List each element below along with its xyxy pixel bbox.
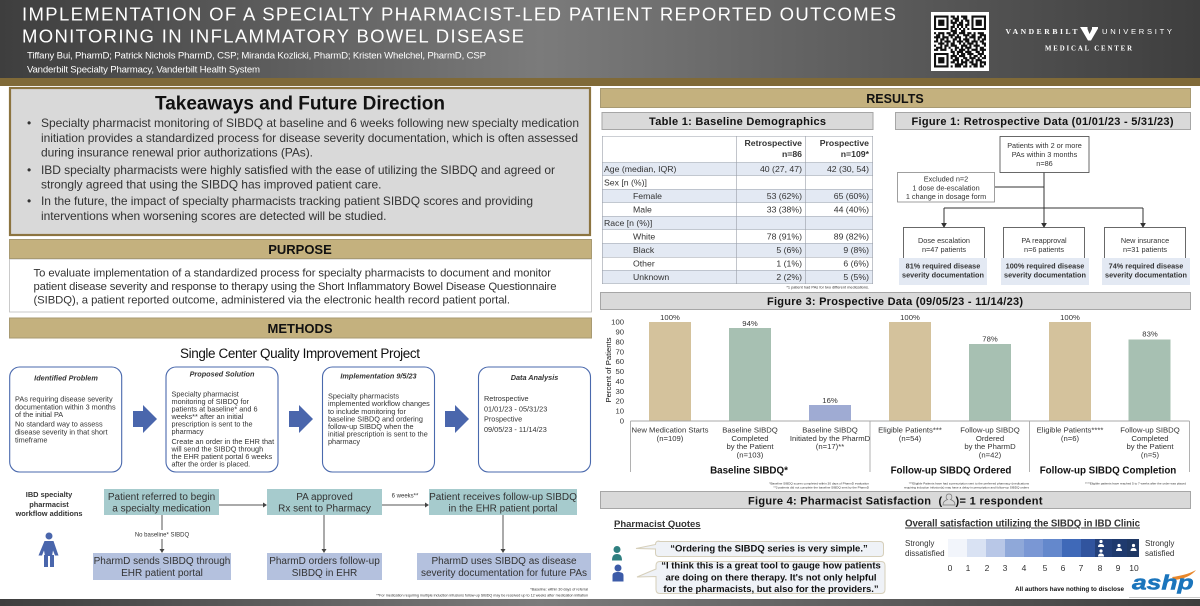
scale numbers: 9 [1116, 563, 1121, 573]
method box: implementation: implemented workflow changes [328, 399, 430, 408]
method box: proposed solution: prescription is sent to the [172, 420, 253, 428]
bullet list: during insurance renewal prior authorizations (PAs). [41, 146, 313, 160]
flow box: patients: PAs within 3 months [1012, 150, 1078, 159]
logo: Vanderbilt University Medical Center: VANDERBILT [1006, 27, 1078, 36]
y axis [604, 318, 624, 426]
method box: proposed solution: after the order is placed. [172, 460, 250, 468]
flow box: excluded: 1 dose de-escalation [912, 184, 980, 192]
demographics table: Unknown [633, 272, 669, 282]
demographics table: Female [633, 191, 662, 201]
scale numbers: 4 [1022, 563, 1027, 573]
data labels [660, 313, 1158, 405]
group titles: Follow-up SIBDQ Ordered [891, 466, 1011, 476]
scale numbers: 5 [1043, 563, 1048, 573]
category labels: Follow-up SIBDQ [960, 426, 1020, 434]
category labels: Completed [731, 434, 769, 443]
heading: figure 1: Figure 1: Retrospective Data (01/01/23 - 5/31/23) [912, 116, 1174, 128]
quote bubble 1: “Ordering the SIBDQ series is very simple.” [670, 544, 868, 554]
heading: takeaways: Takeaways and Future Direction [155, 94, 445, 114]
teal step: receives follow-up: Patient receives follow-up SIBDQ [429, 492, 577, 503]
heading: purpose: PURPOSE [268, 242, 332, 257]
flow box: dose escalation: n=47 patients [922, 245, 966, 254]
panel: figure 1 retrospective data [896, 112, 1190, 285]
y axis: Percent of Patients [604, 337, 613, 402]
connectors [160, 502, 506, 553]
method box: proposed solution: pharmacy [172, 427, 204, 436]
flow box: dose escalation: severity documentation [902, 270, 984, 280]
category labels: Baseline SIBDQ [802, 426, 858, 434]
heading: figure 4: Figure 4: Pharmacist Satisfaction [748, 496, 931, 508]
demographics table: 5 (6%) [776, 245, 802, 255]
category labels: (n=5) [1141, 450, 1160, 460]
category labels [632, 426, 1180, 460]
category labels: by the PharmD [964, 442, 1016, 451]
category labels: (n=6) [1061, 434, 1080, 443]
logo: Vanderbilt University Medical Center: UNIVERSITY [1102, 27, 1172, 36]
demographics table: 5 (5%) [843, 272, 869, 282]
blue step: documentation: severity documentation for future PAs [421, 568, 587, 579]
connector label: no baseline: No baseline* SIBDQ [135, 532, 190, 538]
flow box: new insurance: 74% required disease [1109, 262, 1183, 270]
method box: data analysis: Prospective [484, 414, 522, 424]
demographics table: 6 (6%) [843, 258, 869, 268]
purpose text: (SIBDQ), a patient reported outcome, administered via the electronic health record patient portal. [34, 294, 510, 306]
workflow footnotes [376, 588, 588, 598]
heading: figure 4: )= 1 respondent [956, 496, 1043, 508]
heading: methods: METHODS [268, 321, 333, 336]
icon: teal pharmacist [612, 546, 622, 560]
demographics table: 53 (62%) [767, 191, 802, 201]
chart footnotes: ***Eligible Patients have had a prescription sent to the preferred pharmacy (medications [909, 482, 1029, 486]
bullet list: • [27, 163, 31, 177]
bullet list: • [27, 116, 31, 130]
flow box: patients: n=86 [1036, 159, 1053, 168]
arrow [133, 405, 157, 433]
method box: proposed solution: Proposed Solution [190, 370, 255, 378]
method box: data analysis: Data Analysis [511, 373, 558, 382]
demographics table: Prospective [820, 138, 869, 148]
blue step: documentation [417, 553, 591, 580]
method box: implementation: Implementation 9/5/23 [340, 372, 417, 380]
logo: Vanderbilt University Medical Center [1006, 27, 1172, 52]
teal step: receives follow-up [429, 489, 577, 515]
category labels: Follow-up SIBDQ [1120, 426, 1180, 434]
method box: data analysis [478, 367, 590, 472]
quote bubble 2 [637, 560, 885, 595]
teal step: referred [104, 489, 219, 515]
demographics table: Age (median, IQR) [604, 164, 677, 174]
authors: Tiffany Bui, PharmD; Patrick Nichols PharmD, CSP; Miranda Kozlicki, PharmD; Kristen Whelchel, PharmD, CSP [27, 50, 486, 62]
scale numbers: 0 [948, 563, 953, 573]
panel: methods [10, 318, 592, 472]
heading: results [600, 88, 1190, 108]
flow box: PA reapproval: n=6 patients [1024, 245, 1064, 254]
heading: methods [10, 318, 592, 338]
flow box: excluded [898, 172, 994, 202]
heading: purpose [10, 240, 592, 258]
demographics table: 89 (82%) [834, 232, 869, 242]
demographics table: 65 (60%) [834, 191, 869, 201]
authors [27, 50, 486, 76]
scale numbers: 10 [1129, 563, 1139, 573]
flow box: PA reapproval: PA reapproval [1021, 236, 1067, 245]
data labels: 100% [660, 313, 680, 322]
method box: proposed solution: the EHR patient portal 6 weeks [172, 452, 272, 461]
demographics table: White [633, 232, 655, 242]
panel: figure 4 pharmacist satisfaction [600, 492, 1200, 598]
demographics table: Sex [n (%)] [604, 178, 647, 188]
heading: table 1 [602, 112, 873, 130]
flow box: patients [1000, 136, 1089, 172]
y axis: 40 [615, 377, 624, 386]
demographics table: Male [633, 204, 652, 214]
category labels: Ordered [976, 434, 1004, 443]
y axis: 80 [615, 338, 624, 346]
logo: ashp: ashp [1132, 572, 1194, 594]
method box: implementation [322, 367, 434, 472]
data labels: 16% [822, 396, 838, 405]
demographics table: 78 (91%) [767, 232, 802, 242]
scale numbers: 2 [985, 563, 990, 573]
flow box: PA reapproval: severity documentation [1004, 270, 1086, 280]
scale end labels: Strongly [905, 539, 934, 548]
category labels: Baseline SIBDQ [722, 426, 778, 434]
bullet list: initiation provides a standardized process for disease severity documentation, which is often assessed [41, 131, 578, 145]
method box: proposed solution: monitoring of SIBDQ for [172, 397, 250, 406]
workflow label: IBD specialty [26, 490, 73, 499]
teal step: receives follow-up: in the EHR patient portal [449, 504, 557, 514]
purpose text: To evaluate implementation of a standardized process for specialty pharmacists to document and monitor [34, 268, 551, 280]
method box: proposed solution: Create an order in the EHR that [172, 437, 274, 446]
logo: Vanderbilt University Medical Center: MEDICAL CENTER [1045, 46, 1132, 52]
bullet list: Specialty pharmacist monitoring of SIBDQ at baseline and 6 weeks following new specialty medication [41, 116, 579, 130]
blue step: orders follow-up: SIBDQ in EHR [292, 568, 357, 579]
quotes heading: Pharmacist Quotes [614, 519, 701, 530]
flow box: new insurance: n=31 patients [1123, 245, 1167, 254]
y axis: 50 [615, 367, 624, 376]
flow box: dose escalation: 81% required disease [906, 262, 980, 270]
workflow diagram [15, 489, 591, 598]
purpose text [34, 268, 556, 306]
flow box: new insurance: New insurance [1121, 236, 1169, 245]
demographics table: 42 (30, 54) [827, 164, 869, 174]
bullet list: IBD specialty pharmacists were highly satisfied with the ease of utilizing the SIBDQ and agreed or [41, 163, 555, 177]
heat scale [948, 539, 1139, 557]
arrow [289, 405, 313, 433]
teal step: PA approved: PA approved [296, 492, 353, 503]
footer bar [0, 599, 1200, 606]
authors: Vanderbilt Specialty Pharmacy, Vanderbilt Health System [27, 64, 260, 76]
demographics table: 40 (27, 47) [760, 164, 802, 174]
category labels: by the Patient [1126, 442, 1174, 451]
arrow [445, 405, 469, 433]
method box: identified problem: PAs requiring disease severity [15, 394, 113, 404]
blue step: orders follow-up: PharmD orders follow-up [269, 556, 380, 567]
heading: figure 4: ( [938, 496, 942, 508]
blue step: documentation: PharmD uses SIBDQ as disease [431, 556, 577, 567]
blue step: sends SIBDQ: PharmD sends SIBDQ through [94, 556, 230, 567]
group titles [710, 466, 1176, 476]
demographics table: Retrospective [745, 138, 802, 148]
teal step: PA approved [267, 489, 382, 515]
workflow footnotes: *Baseline: within 30 days of referral [530, 588, 588, 592]
demographics table: 9 (8%) [843, 245, 869, 255]
scale numbers: 6 [1061, 563, 1066, 573]
data labels: 78% [982, 334, 998, 344]
bullet list: In the future, the impact of specialty pharmacists tracking patient SIBDQ scores and providing [41, 194, 533, 208]
scale end labels: dissatisfied [905, 549, 945, 558]
category labels: Eligible Patients*** [878, 426, 942, 434]
method box: identified problem [10, 367, 122, 472]
title [22, 4, 896, 46]
heading: figure 1 [896, 112, 1190, 130]
y axis: 70 [615, 348, 624, 356]
scale numbers: 8 [1098, 563, 1103, 573]
scale end labels: Strongly [1145, 539, 1174, 548]
panel: takeaways and future direction [10, 88, 590, 235]
chart footnotes: ****Eligible patients have reached 5 to 7 weeks after the order was placed [1085, 482, 1186, 486]
method box: identified problem: disease severity in that short [15, 428, 107, 436]
method box: implementation: initial prescription is sent to the [328, 430, 428, 438]
category labels: Eligible Patients**** [1037, 426, 1103, 434]
demographics table: 33 (38%) [767, 204, 802, 214]
method box: identified problem: timeframe [15, 436, 47, 444]
scale numbers: 3 [1003, 563, 1008, 573]
data labels: 100% [1060, 313, 1080, 322]
y axis: 0 [620, 416, 624, 426]
demographics table: 1 (1%) [776, 258, 802, 268]
category labels: (n=103) [737, 450, 764, 460]
blue step: sends SIBDQ: EHR patient portal [121, 568, 203, 579]
demographics table: Other [633, 258, 655, 268]
disclosure: All authors have nothing to disclose [1015, 586, 1124, 593]
flow box: dose escalation: Dose escalation [918, 236, 970, 245]
blue step: orders follow-up [267, 553, 382, 580]
method box: proposed solution: Specialty pharmacist [172, 390, 239, 398]
data labels: 83% [1142, 330, 1158, 338]
bullet list [27, 116, 579, 223]
heading: figure 3: Figure 3: Prospective Data (09/05/23 - 11/14/23) [767, 296, 1023, 308]
bar chart [604, 313, 1190, 476]
axis and group dividers [630, 421, 1190, 472]
category labels: by the Patient [726, 442, 774, 451]
group titles: Follow-up SIBDQ Completion [1040, 466, 1176, 476]
bullet list: • [27, 194, 31, 208]
bullet list: interventions when worsening scores are detected will be studied. [41, 209, 386, 223]
quote bubble 2: “I think this is a great tool to gauge how patients [661, 560, 881, 572]
heading: figure 3 [600, 292, 1190, 310]
demographics table: Race [n (%)] [604, 218, 652, 228]
pharmacist quotes [612, 519, 885, 595]
quote bubble 2: are doing on there therapy. It's not only helpful [665, 572, 877, 584]
demographics table: n=86 [782, 149, 802, 159]
flow box: new insurance: severity documentation [1105, 270, 1187, 280]
heading: figure 4 [600, 492, 1190, 508]
method box: identified problem: of the initial PA [15, 410, 63, 419]
method box: implementation: follow-up SIBDQ when the [328, 422, 414, 431]
method box: data analysis: 09/05/23 - 11/14/23 [484, 425, 547, 434]
scale numbers: 1 [966, 563, 971, 573]
flow box: excluded: 1 change in dosage form [906, 192, 986, 201]
method box: implementation: pharmacy [328, 437, 360, 446]
category labels: (n=109) [657, 434, 684, 443]
method box: proposed solution [166, 367, 278, 472]
data labels: 100% [900, 313, 920, 322]
y axis: 90 [615, 328, 624, 336]
y axis: 60 [615, 357, 624, 366]
chart footnotes: *Baseline SIBDQ scores completed within 30 days of PharmD evaluation [769, 482, 869, 486]
method box: identified problem: No standard way to assess [15, 420, 103, 428]
flow box: PA reapproval: 100% required disease [1006, 262, 1084, 270]
category labels: (n=17)** [816, 442, 844, 451]
method box: identified problem: Identified Problem [34, 374, 98, 382]
quote bubble 2: for the pharmacists, but also for the providers.” [663, 584, 879, 595]
method box: data analysis: Retrospective [484, 394, 529, 403]
demographics table [602, 136, 873, 284]
demographics table: n=109* [841, 149, 870, 159]
workflow label: workflow additions [15, 509, 82, 518]
chart footnotes: requiring induction infusion(s) may have a delay in prescription and follow-up SIBDQ orders [904, 486, 1029, 490]
workflow label [15, 490, 82, 518]
teal step: PA approved: Rx sent to Pharmacy [278, 504, 371, 514]
teal step: referred: Patient referred to begin [108, 492, 215, 503]
method box: data analysis: 01/01/23 - 05/31/23 [484, 404, 547, 414]
category labels: Initiated by the PharmD [790, 434, 871, 443]
workflow label: pharmacist [29, 500, 69, 509]
panel: purpose [10, 240, 592, 312]
method box: proposed solution: will send the SIBDQ through [170, 444, 263, 454]
scale end labels [905, 539, 1174, 558]
flow box: new insurance [1102, 228, 1190, 285]
demographics table: 44 (40%) [834, 204, 869, 214]
panel: table 1 baseline demographics [602, 112, 873, 290]
y axis: 100 [611, 318, 624, 326]
QR code [931, 12, 989, 71]
connector label: no baseline [132, 530, 192, 539]
bullet list: strongly agreed that using the SIBDQ has improved patient care. [41, 178, 382, 192]
teal step: referred: a specialty medication [112, 504, 211, 514]
flow box: patients: Patients with 2 or more [1007, 141, 1082, 150]
title: MONITORING IN INFLAMMATORY BOWEL DISEASE [22, 26, 524, 46]
category labels: (n=54) [899, 434, 922, 443]
title: IMPLEMENTATION OF A SPECIALTY PHARMACIST-LED PATIENT REPORTED OUTCOMES [22, 4, 896, 24]
demographics table: Black [633, 245, 655, 255]
workflow footnotes: **For medication requiring multiple induction infusions follow-up SIBDQ may be received up to 12 weeks after medication initiation [376, 594, 588, 598]
y axis: 10 [615, 406, 624, 416]
method box: identified problem: documentation within 3 months [15, 402, 116, 412]
method box: implementation: Specialty pharmacists [328, 392, 399, 400]
data labels: 94% [742, 319, 758, 328]
table footnote: *1 patient had PAs for two different medications. [786, 284, 869, 290]
icon: blue pharmacist [612, 564, 624, 582]
flow box: dose escalation [899, 228, 987, 285]
method box: implementation: to include monitoring for [328, 407, 406, 416]
group titles: Baseline SIBDQ* [710, 466, 788, 476]
scale end labels: satisfied [1145, 549, 1174, 558]
scale heading: Overall satisfaction utilizing the SIBDQ in IBD Clinic [905, 518, 1141, 530]
connector label: 6 weeks: 6 weeks** [392, 494, 419, 500]
connectors [942, 172, 1145, 227]
scale numbers: 7 [1079, 563, 1084, 573]
flow box: PA reapproval [1001, 228, 1089, 285]
heading: results: RESULTS [866, 92, 924, 106]
method box: implementation: baseline SIBDQ and ordering [328, 414, 423, 424]
bars [649, 322, 1170, 421]
category labels: New Medication Starts [632, 426, 709, 434]
icon: person [38, 532, 58, 567]
method box: proposed solution: weeks** after an initial [170, 412, 244, 421]
chart footnotes: **3 patients did not complete the baseline SIBDQ sent by the PharmD [773, 486, 870, 490]
chart footnotes [769, 482, 1186, 490]
respondent icons [1098, 540, 1136, 556]
quote bubble 1 [636, 541, 884, 556]
heading: table 1: Table 1: Baseline Demographics [649, 116, 826, 128]
method box: proposed solution: patients at baseline* and 6 [172, 404, 258, 414]
purpose text: patient disease severity and response to therapy using the Short Inflammatory Bowel Disease Questionnaire [34, 281, 556, 293]
subheading: single center project: Single Center Quality Improvement Project [180, 346, 420, 361]
category labels: Completed [1131, 434, 1169, 443]
category labels: (n=42) [979, 450, 1002, 460]
panel: figure 3 prospective data [600, 292, 1190, 490]
flow box: excluded: Excluded n=2 [924, 174, 968, 184]
satisfaction scale [905, 518, 1174, 573]
y axis: 30 [615, 387, 624, 396]
demographics table: 2 (2%) [776, 272, 802, 282]
header banner [0, 0, 1200, 86]
blue step: sends SIBDQ [93, 553, 231, 580]
y axis: 20 [615, 396, 624, 406]
scale numbers [948, 563, 1139, 573]
